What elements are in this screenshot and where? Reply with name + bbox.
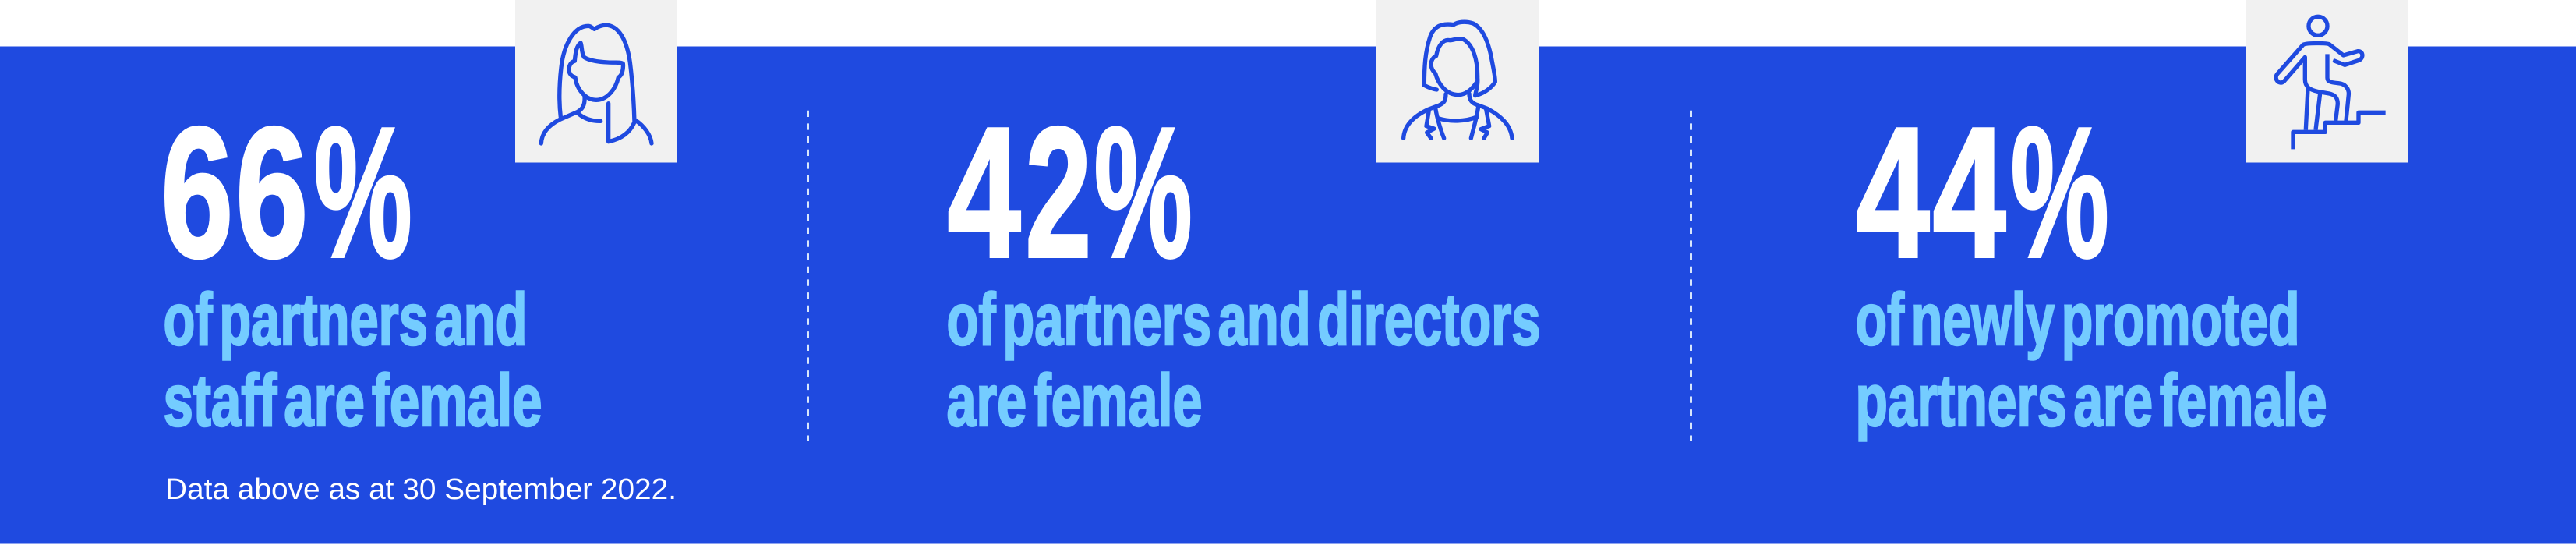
- stat: 44%: 4: [1857, 90, 1930, 296]
- stat: 44%: 4: [1933, 90, 2006, 296]
- description: newly promoted partners: partners are female: [1855, 359, 2327, 442]
- panel: partners and directors: [946, 0, 1540, 442]
- stat: 66%: 6: [161, 90, 233, 296]
- footnote: Data above as at 30 September 2022.: [165, 473, 677, 506]
- stat: 42%: %: [1094, 90, 1193, 296]
- icon box: person climbing stairs: [2246, 0, 2408, 162]
- icon box: woman with short hair: [1376, 0, 1539, 162]
- stat: 42%: 2: [1025, 90, 1091, 296]
- stat: 66%: %: [314, 90, 412, 296]
- description: partners and staff: of partners and: [164, 278, 527, 361]
- stat: 42%: 4: [948, 90, 1021, 296]
- panel: newly promoted partners: [1855, 0, 2408, 442]
- panel: partners and staff: [161, 0, 677, 506]
- description: newly promoted partners: of newly promoted: [1855, 278, 2299, 361]
- icon box: woman with long hair: [515, 0, 677, 162]
- stat: 44%: %: [2011, 90, 2109, 296]
- description: partners and directors: are female: [946, 359, 1202, 442]
- description: partners and staff: staff are female: [164, 359, 542, 442]
- stat: 66%: 6: [235, 90, 308, 296]
- description: partners and directors: of partners and directors: [946, 278, 1540, 361]
